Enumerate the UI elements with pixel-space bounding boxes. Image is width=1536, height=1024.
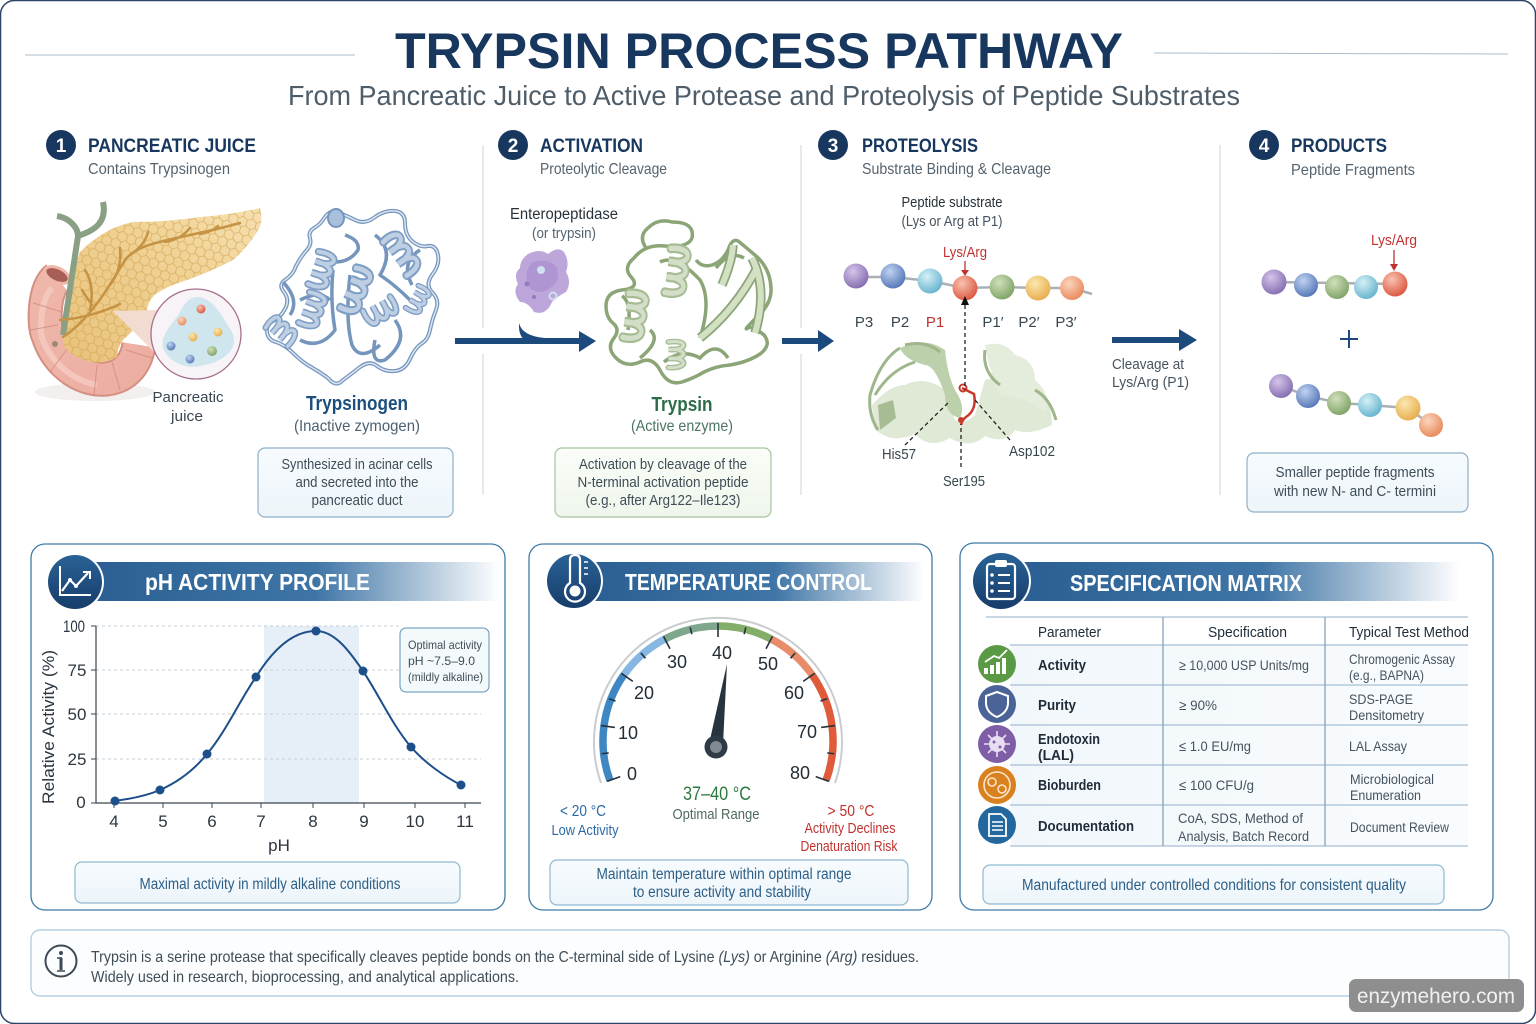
label: low activity <box>552 803 619 839</box>
table header row: Typical Test Method <box>1349 625 1469 641</box>
step 1 section: pancreatic juice <box>30 130 453 517</box>
step 2 heading <box>498 130 667 178</box>
substrate position labels: P2′ <box>1018 314 1040 331</box>
step 3 heading: PROTEOLYSIS <box>862 136 978 157</box>
line chart: activity vs pH: 5 <box>158 812 168 831</box>
label: activity declines: > 50 °C <box>828 803 874 820</box>
step 3 heading: 3 <box>828 136 838 157</box>
line chart: activity vs pH: 50 <box>68 705 86 724</box>
icon: trypsin protein ribbon <box>606 221 771 383</box>
line chart: activity vs pH: 75 <box>68 661 86 680</box>
row: purity: ≥ 90% <box>1179 697 1217 713</box>
footer note <box>75 862 460 903</box>
step 3 section: proteolysis <box>818 130 1092 490</box>
gauge: temperature <box>594 618 842 784</box>
label: or trypsin: (or trypsin) <box>532 226 596 242</box>
table header row: Parameter <box>1038 625 1101 641</box>
label: cleavage at lys/arg: Lys/Arg (P1) <box>1112 374 1189 391</box>
label: peptide substrate: (Lys or Arg at P1) <box>902 214 1002 230</box>
row: bioburden <box>978 766 1434 804</box>
label: active enzyme: (Active enzyme) <box>631 418 733 435</box>
table header row <box>1038 625 1469 641</box>
row: bioburden: ≤ 100 CFU/g <box>1179 777 1254 793</box>
gauge: temperature: 20 <box>634 683 654 703</box>
row: purity: Densitometry <box>1349 707 1424 723</box>
panel: specification matrix <box>960 543 1493 910</box>
label: activity declines: Activity Declines <box>804 821 896 837</box>
product fragment 2 <box>1269 374 1443 437</box>
step 2 heading: 2 <box>508 136 518 157</box>
peptide substrate bead chain <box>844 264 1092 300</box>
callout: optimal activity: Optimal activity <box>408 638 482 652</box>
dashed guide lines <box>905 298 1010 467</box>
label: activity declines: Denaturation Risk <box>800 839 898 855</box>
label: lys/arg marker <box>943 245 987 276</box>
row: endotoxin: ≤ 1.0 EU/mg <box>1179 738 1251 754</box>
product fragment 1 <box>1262 270 1408 299</box>
callout: smaller fragments <box>1247 453 1468 512</box>
panel: temperature control <box>529 544 932 910</box>
arrowhead: pointing to P1 <box>961 296 969 305</box>
row: bioburden: Microbiological <box>1350 771 1434 787</box>
line chart: activity vs pH: 11 <box>456 812 474 831</box>
line chart: activity vs pH: 9 <box>359 812 369 831</box>
callout: optimal activity <box>400 628 489 692</box>
row: endotoxin <box>978 725 1407 764</box>
arrow: trypsin to proteolysis <box>782 330 834 352</box>
line chart: activity vs pH: 10 <box>406 812 424 831</box>
line chart: activity vs pH: 25 <box>68 750 86 769</box>
step 1 heading <box>46 130 256 178</box>
label: trypsinogen: Trypsinogen <box>306 393 408 415</box>
label: ser195: Ser195 <box>943 473 985 490</box>
label: lys/arg marker: Lys/Arg <box>1371 233 1417 249</box>
step 4 heading: 4 <box>1259 136 1270 157</box>
footer note <box>550 860 908 905</box>
icon: enteropeptidase enzyme blob <box>515 249 569 313</box>
line chart: activity vs pH: 100 <box>63 617 85 636</box>
substrate position labels: P3 <box>855 314 873 331</box>
row: activity: Chromogenic Assay <box>1349 651 1455 667</box>
gauge: temperature: 80 <box>790 763 810 783</box>
panel: ph activity profile <box>31 544 505 910</box>
gauge: temperature: 30 <box>667 652 687 672</box>
step 4 heading: PRODUCTS <box>1291 136 1387 157</box>
callout: optimal activity: (mildly alkaline) <box>408 670 483 684</box>
step 4 heading <box>1249 130 1415 179</box>
gauge: temperature: 50 <box>758 654 778 674</box>
line chart: activity vs pH: 7 <box>256 812 266 831</box>
row: documentation: Documentation <box>1038 818 1134 835</box>
panel header <box>971 551 1460 611</box>
footer note: to ensure activity and stability <box>633 884 811 901</box>
callout: activation by cleavage <box>555 448 771 517</box>
info text <box>91 949 919 986</box>
gauge: temperature: 0 <box>627 764 637 784</box>
row: endotoxin: LAL Assay <box>1349 738 1407 754</box>
row: purity <box>978 685 1424 723</box>
callout: activation by cleavage: N-terminal activation peptide <box>578 475 748 491</box>
step 3 heading: Substrate Binding & Cleavage <box>862 161 1051 178</box>
label: activity declines <box>800 803 898 855</box>
plus sign <box>1340 330 1358 348</box>
label: inactive zymogen: (Inactive zymogen) <box>294 418 420 435</box>
panel header: SPECIFICATION MATRIX <box>1070 570 1303 596</box>
row: purity: SDS-PAGE <box>1349 691 1413 707</box>
label: optimal range <box>672 784 760 823</box>
arrow: cleavage to products <box>1112 329 1197 351</box>
row: documentation: Document Review <box>1350 819 1450 835</box>
line chart: activity vs pH: pH <box>268 836 290 855</box>
step 4 section: products <box>1247 130 1468 512</box>
footer note <box>983 865 1444 904</box>
callout: synthesized: pancreatic duct <box>312 493 402 509</box>
substrate position labels <box>855 314 1077 331</box>
step 2 heading: ACTIVATION <box>540 136 643 157</box>
gauge: temperature: 40 <box>712 643 732 663</box>
panel header <box>545 552 925 610</box>
icon: info <box>46 946 76 976</box>
line chart: activity vs pH: 4 <box>109 812 119 831</box>
callout: smaller fragments: with new N- and C- termini <box>1273 484 1436 500</box>
info text: Trypsin is a serine protease that specifically cleaves peptide bonds on the C-terminal side of Lysine (Lys) or Arginine (Arg) residues. <box>91 949 919 966</box>
label: peptide substrate: Peptide substrate <box>902 195 1002 211</box>
label: optimal range: 37–40 °C <box>683 784 751 805</box>
line chart: activity vs pH: 8 <box>308 812 318 831</box>
gauge: temperature: 70 <box>797 722 817 742</box>
table header row: Specification <box>1208 625 1287 641</box>
footer note: Maintain temperature within optimal range <box>596 866 852 883</box>
title: TRYPSIN PROCESS PATHWAY <box>395 23 1123 79</box>
step 2 section: activation <box>498 130 771 517</box>
row: purity: Purity <box>1038 697 1077 714</box>
callout: smaller fragments: Smaller peptide fragments <box>1276 465 1434 481</box>
row: bioburden: Bioburden <box>1038 777 1101 794</box>
row: bioburden: Enumeration <box>1350 787 1421 803</box>
info text: Widely used in research, bioprocessing, and analytical applications. <box>91 969 519 986</box>
callout: activation by cleavage: Activation by cleavage of the <box>579 457 747 473</box>
label: lys/arg marker: Lys/Arg <box>943 245 987 261</box>
label: low activity: < 20 °C <box>560 803 606 820</box>
line chart: activity vs pH: Relative Activity (%) <box>39 650 58 804</box>
specification table <box>978 617 1469 846</box>
step 1 heading: PANCREATIC JUICE <box>88 136 256 157</box>
substrate position labels: P1 <box>926 314 944 331</box>
step 4 heading: Peptide Fragments <box>1291 162 1415 179</box>
substrate position labels: P2 <box>891 314 909 331</box>
label: low activity: Low Activity <box>552 823 619 839</box>
label: pancreatic juice <box>152 389 224 425</box>
label: cleavage at lys/arg: Cleavage at <box>1112 356 1185 373</box>
gauge: temperature: 10 <box>618 723 638 743</box>
label: pancreatic juice: Pancreatic <box>152 389 224 406</box>
row: activity: ≥ 10,000 USP Units/mg <box>1179 657 1309 673</box>
substrate position labels: P1′ <box>982 314 1004 331</box>
footer note: Manufactured under controlled conditions for consistent quality <box>1022 877 1406 894</box>
panel header: pH ACTIVITY PROFILE <box>145 569 370 595</box>
icon: pancreas and duodenum illustration <box>30 202 262 401</box>
label: optimal range: Optimal Range <box>672 807 760 823</box>
arrow: trypsinogen to trypsin <box>455 323 596 352</box>
row: documentation: Analysis, Batch Record <box>1178 828 1309 844</box>
callout: activation by cleavage: (e.g., after Arg122–Ile123) <box>586 493 740 509</box>
icon: trypsinogen protein ribbon <box>265 209 438 384</box>
label: his57: His57 <box>882 446 916 463</box>
row: activity <box>978 645 1455 683</box>
line chart: activity vs pH <box>39 617 481 855</box>
row: documentation: CoA, SDS, Method of <box>1178 810 1303 826</box>
label: pancreatic juice: juice <box>170 408 203 425</box>
subtitle: From Pancreatic Juice to Active Protease and Proteolysis of Peptide Substrates <box>288 80 1240 111</box>
callout: synthesized: and secreted into the <box>296 475 418 491</box>
row: activity: (e.g., BAPNA) <box>1349 667 1424 683</box>
callout: optimal activity: pH ~7.5–9.0 <box>408 654 475 668</box>
info bar <box>31 930 1509 996</box>
label: lys/arg marker <box>1371 233 1417 271</box>
line chart: activity vs pH: 6 <box>207 812 217 831</box>
step 3 heading <box>818 130 1051 178</box>
label: peptide substrate <box>902 195 1002 230</box>
substrate position labels: P3′ <box>1055 314 1077 331</box>
step 1 heading: 1 <box>56 136 67 157</box>
label: asp102: Asp102 <box>1009 443 1055 460</box>
footer note: Maximal activity in mildly alkaline conditions <box>140 876 401 893</box>
step 2 heading: Proteolytic Cleavage <box>540 161 667 178</box>
watermark <box>1349 979 1524 1012</box>
step 1 heading: Contains Trypsinogen <box>88 161 230 178</box>
icon: binding pocket <box>870 342 1056 444</box>
label: enteropeptidase: Enteropeptidase <box>510 206 618 223</box>
row: activity: Activity <box>1038 657 1087 674</box>
line chart: activity vs pH: 0 <box>76 793 86 812</box>
watermark: enzymehero.com <box>1357 985 1515 1008</box>
row: endotoxin: (LAL) <box>1038 747 1074 764</box>
row: documentation <box>978 806 1450 844</box>
label: cleavage at lys/arg <box>1112 356 1189 391</box>
panel header <box>46 553 500 611</box>
gauge: temperature: 60 <box>784 683 804 703</box>
row: endotoxin: Endotoxin <box>1038 731 1100 748</box>
panel header: TEMPERATURE CONTROL <box>625 569 872 595</box>
callout: synthesized: Synthesized in acinar cells <box>282 457 432 473</box>
label: trypsin: Trypsin <box>652 394 712 416</box>
callout: synthesized <box>258 448 453 517</box>
